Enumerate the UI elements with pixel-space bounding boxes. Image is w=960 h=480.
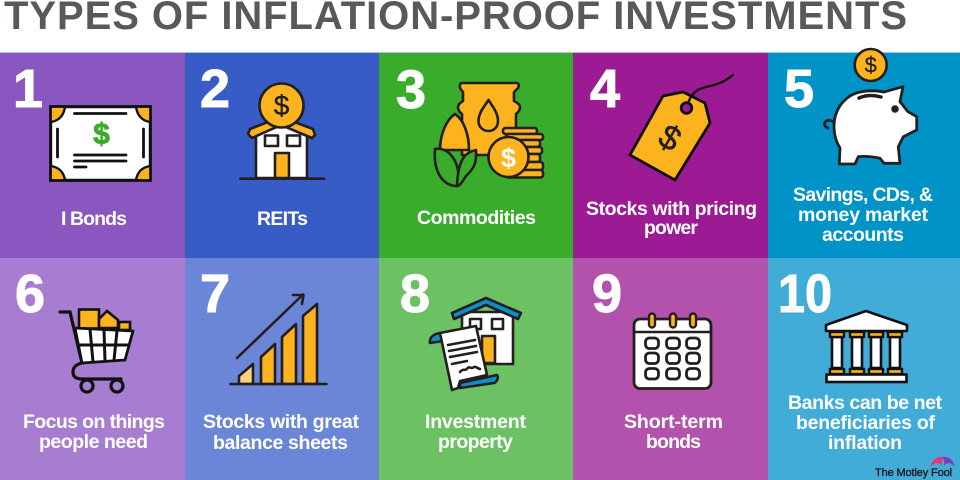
- panel: 10 Banks can be net beneficiaries of inflation: beneficiaries of: [796, 412, 936, 434]
- icon: shopping cart: [60, 310, 133, 392]
- label: Focus on things: [23, 411, 165, 433]
- number 2: 2: [200, 59, 230, 119]
- icon: coin: [855, 49, 887, 81]
- number 9: 9: [592, 264, 622, 324]
- icon: oil barrel, corn and coins: [435, 83, 543, 186]
- label: Savings, CDs, &: [793, 184, 933, 206]
- label: Stocks with great: [203, 411, 360, 433]
- label: Short-term: [624, 411, 723, 433]
- label: Stocks with pricing: [586, 198, 757, 220]
- icon: price tag: [630, 75, 733, 180]
- icon: calendar: [634, 314, 711, 388]
- number 4: 4: [590, 59, 620, 119]
- icon: price tag: $: [652, 117, 687, 159]
- panel: 5 Savings, CDs, & money market accounts: [768, 49, 960, 258]
- panel: 6 Focus on things people need: people need: [39, 431, 148, 453]
- number 10: 10: [778, 264, 832, 324]
- panel: 5 Savings, CDs, & money market accounts: accounts: [822, 224, 904, 246]
- label: REITs: [257, 208, 308, 230]
- icon: bond certificate: $: [93, 118, 110, 151]
- number 7: 7: [200, 264, 230, 324]
- panel: 2 REITs: [185, 53, 379, 258]
- panel: 4 Stocks with pricing power: [573, 53, 768, 258]
- panel: 4 Stocks with pricing power: power: [644, 217, 698, 239]
- panel: 7 Stocks with great balance sheets: balance sheets: [213, 432, 348, 454]
- panel: 8 Investment property: property: [438, 431, 513, 453]
- icon: rising bar chart: [230, 294, 326, 384]
- icon: bond certificate: [50, 106, 150, 180]
- label: Banks can be net: [788, 392, 942, 414]
- icon: piggy bank: [824, 87, 917, 164]
- label: I Bonds: [61, 208, 127, 230]
- icon: house with coin: [240, 84, 324, 179]
- label: Commodities: [417, 207, 536, 229]
- icon: bank building: [826, 311, 907, 382]
- number 6: 6: [15, 264, 45, 324]
- icon: house and deed: [430, 298, 521, 390]
- panel: 3 Commodities: [379, 53, 573, 258]
- panel: 1 I Bonds: [0, 53, 185, 258]
- logo: The Motley Fool: [875, 457, 955, 479]
- icon: house with coin: $: [274, 90, 290, 121]
- number 5: 5: [784, 59, 814, 119]
- panel: 10 Banks can be net beneficiaries of inflation: [768, 258, 960, 480]
- panel: 9 Short-term bonds: bonds: [646, 431, 701, 453]
- icon: coin: $: [865, 52, 877, 78]
- number 3: 3: [396, 60, 426, 120]
- number 1: 1: [13, 59, 43, 119]
- panel: 7 Stocks with great balance sheets: [185, 258, 379, 480]
- label: Investment: [425, 411, 526, 433]
- icon: oil barrel, corn and coins: $: [501, 143, 516, 173]
- panel: 10 Banks can be net beneficiaries of inflation: inflation: [828, 432, 902, 454]
- panel: 6 Focus on things people need: [0, 258, 185, 480]
- panel: 9 Short-term bonds: [573, 258, 768, 480]
- panel: 8 Investment property: [379, 258, 573, 480]
- number 8: 8: [400, 264, 430, 324]
- logo: The Motley Fool: The Motley Fool: [875, 467, 952, 479]
- panel: 5 Savings, CDs, & money market accounts: money market: [798, 204, 928, 226]
